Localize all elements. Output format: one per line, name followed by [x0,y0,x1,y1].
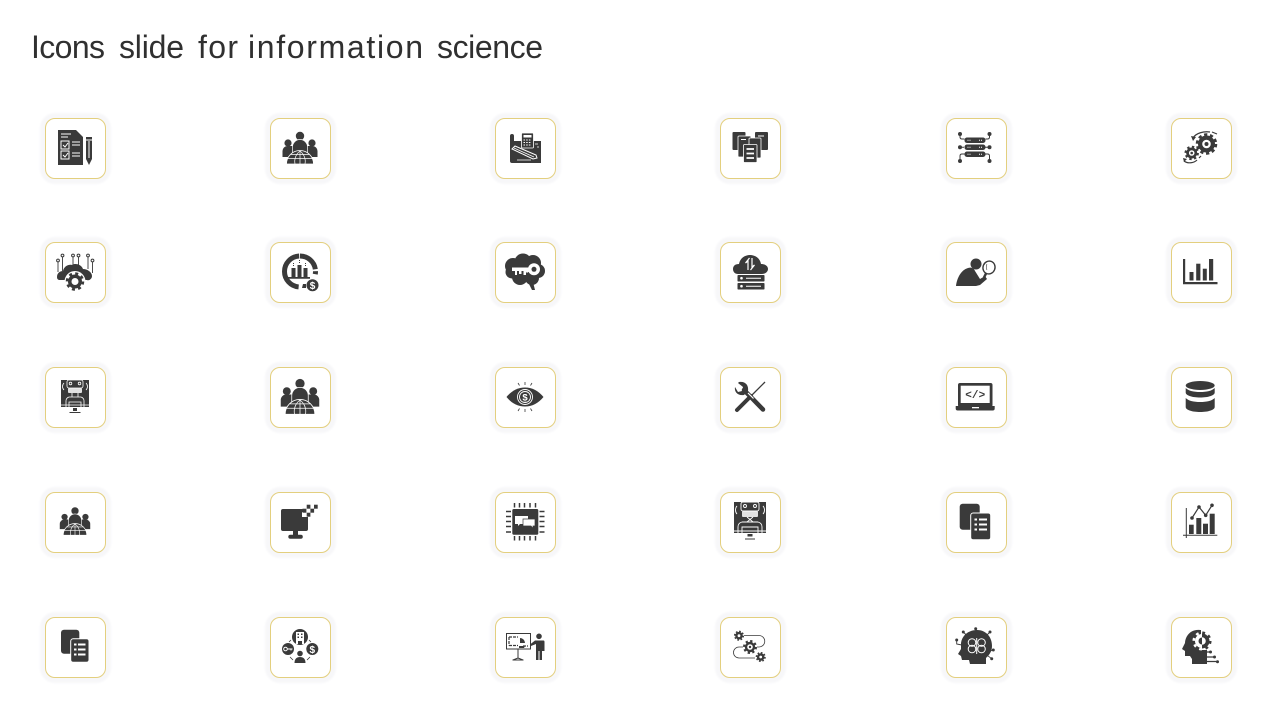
title [31,29,543,65]
panel: mind gears card [1171,617,1232,678]
panel: business cycle card [270,617,331,678]
panel: global team card small second [45,492,106,553]
icon: database cylinder [1186,381,1215,412]
panel: cloud server card [720,242,781,303]
panel: tools card [720,367,781,428]
panel: AI brain head card [946,617,1007,678]
icon: blueprint with calculator and pencil [510,133,541,163]
icon: wrench and screwdriver [734,382,766,412]
panel: revenue analytics card [270,242,331,303]
icon: robot on large monitor [734,502,766,540]
icon: cloud sync server [733,255,768,290]
panel: document checklist card [45,118,106,179]
icon: people with globe small [60,507,90,535]
panel: brain key card [495,242,556,303]
title: for [198,29,238,65]
icon: processor with chat bubbles [506,503,544,540]
icon: donut with bars and dollar badge [282,254,318,292]
icon: building, key, dollar and person cycle: $ [310,645,316,656]
panel: documents list card bottom [45,617,106,678]
icon: cloud with gear and circuit pins [56,254,94,291]
icon: stacked documents [732,132,768,162]
panel: robot monitor card large [720,492,781,553]
icon: document list small [61,630,88,662]
icon: robot on monitor [61,380,89,413]
panel: database card [1171,367,1232,428]
panel: pixel monitor card [270,492,331,553]
panel: global team card small [270,118,331,179]
icon: donut with bars and dollar badge: $ [310,281,316,292]
icon: people with large globe [280,378,320,414]
icon: brain with key [505,254,545,290]
icon: head with brain circuits [955,627,995,664]
panel: line and bar analytics card [1171,492,1232,553]
icon: person with magnifying glass [956,258,996,286]
icon: gears connected by a path [733,630,766,662]
panel: blueprint card [495,118,556,179]
panel: documents list card [946,492,1007,553]
icon: monitor with pixels [281,504,318,539]
panel: stacked documents card [720,118,781,179]
icon: bar chart [1183,259,1218,284]
title: science [437,29,543,65]
icon: laptop with code [956,383,995,410]
title: Icons [31,29,105,65]
panel: cloud gear card [45,242,106,303]
panel: person with magnifier card [946,242,1007,303]
icon: eye with dollar [506,382,544,412]
icon: building, key, dollar and person cycle [282,629,318,663]
panel: rotating gears card [1171,118,1232,179]
panel: chip chat card [495,492,556,553]
title: information [248,29,423,65]
panel: gear workflow card [720,617,781,678]
icon: rotating gears [1183,131,1218,164]
title: slide [119,29,184,65]
panel: server network card [946,118,1007,179]
icon: head with gear and circuits [1182,630,1219,664]
icon: eye with dollar: $ [522,392,528,404]
panel: global team card large [270,367,331,428]
icon: presenter with board [506,633,544,660]
icon: server network [958,132,992,163]
icon: bars with line chart [1183,504,1218,538]
panel: presentation card [495,617,556,678]
icon: laptop with code: </> [965,390,986,402]
panel: financial vision card [495,367,556,428]
icon: people with globe [282,132,318,164]
icon: checklist document and pencil [58,130,92,165]
icon: document list [960,504,990,540]
panel: bar chart card [1171,242,1232,303]
panel: robot monitor card small [45,367,106,428]
panel: code laptop card [946,367,1007,428]
